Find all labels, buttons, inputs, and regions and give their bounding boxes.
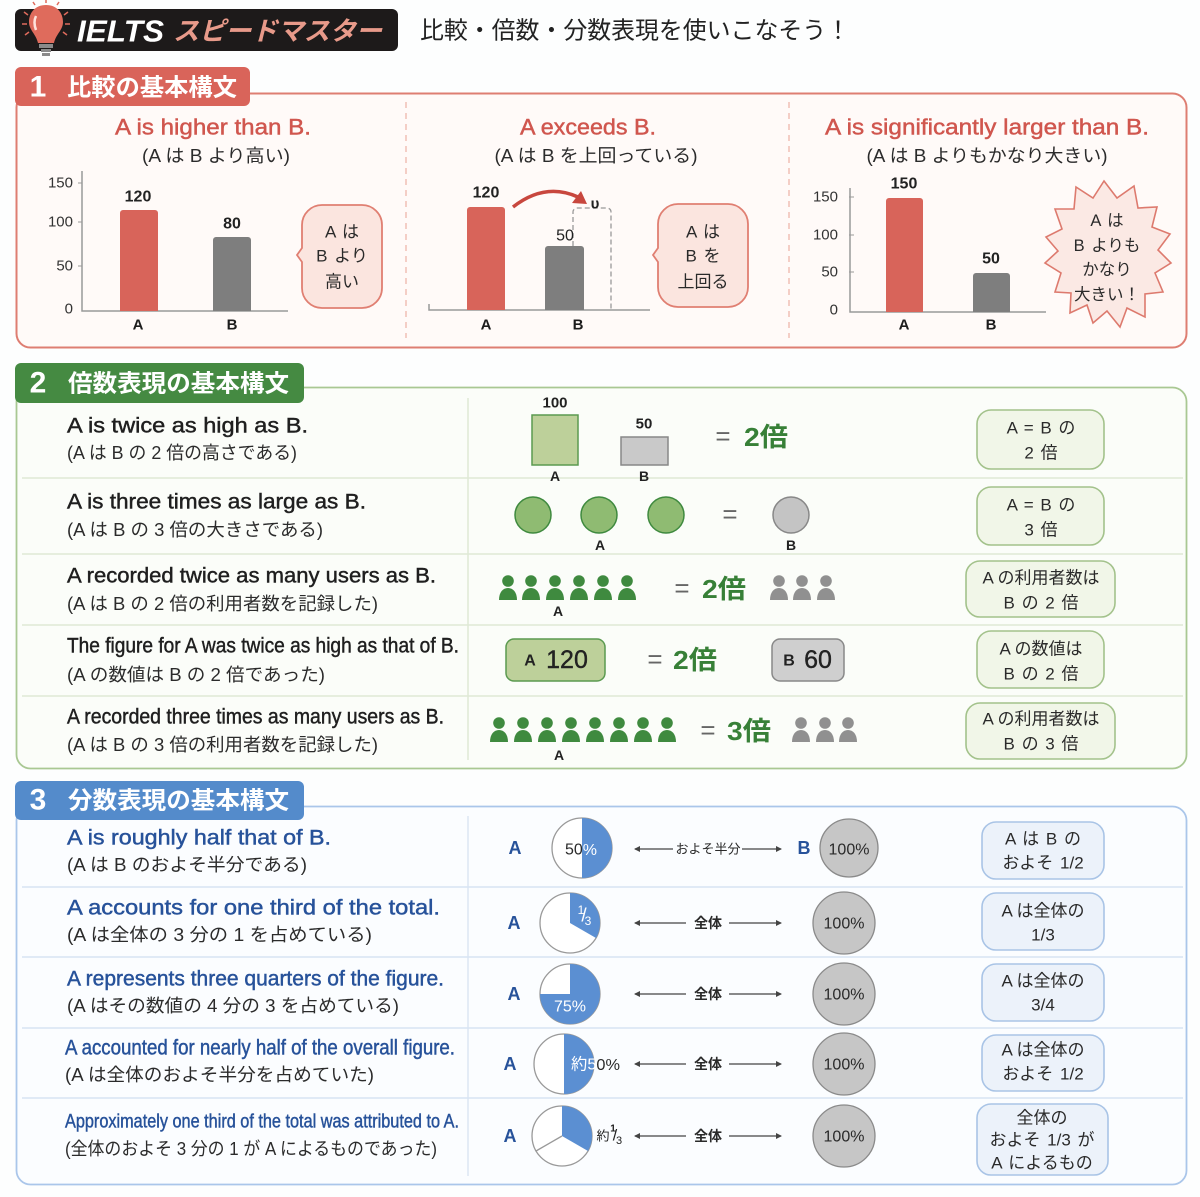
- row 2-5 people: [490, 715, 857, 763]
- row 3-4 callout: [982, 1035, 1104, 1091]
- row 2-5 callout: B の 3 倍: [1004, 734, 1078, 754]
- row 3-3 pie comparison: 全体: [694, 986, 722, 1002]
- row 3-3 text: (A はその数値の 4 分の 3 を占めている): [67, 996, 399, 1016]
- bar chart 3: 50: [982, 250, 1000, 268]
- section 2 tab: 倍数表現の基本構文: [68, 370, 289, 398]
- bar chart 3: [813, 176, 1046, 334]
- row 2-2 text: [67, 490, 366, 540]
- row 2-3 callout: B の 2 倍: [1004, 594, 1078, 612]
- bar chart 1: 120: [125, 188, 151, 206]
- row 3-5 text: Approximately one third of the total was attributed to A.: [65, 1112, 459, 1132]
- row 3-2 pie comparison: 全体: [694, 915, 722, 931]
- row 2-4 value boxes: [506, 639, 844, 681]
- row 3-5 pie comparison: /: [613, 1128, 618, 1144]
- row 3-5 pie comparison: A: [504, 1126, 516, 1146]
- bar chart 1: 50: [56, 258, 73, 274]
- row 3-2 text: (A は全体の 3 分の 1 を占めている): [67, 925, 372, 945]
- row 3-2 pie comparison: 1: [578, 903, 585, 917]
- row 3-2 text: [67, 896, 440, 945]
- row 2-4 value boxes: 120: [546, 646, 588, 674]
- row 2-3 callout: [966, 561, 1115, 617]
- row 2-4 value boxes: B: [783, 652, 795, 670]
- row 3-1 pie comparison: A: [508, 838, 522, 858]
- bar chart 3: A: [899, 316, 910, 334]
- row 3-1 pie comparison: 100%: [829, 842, 869, 858]
- row 2-3 callout: A の利用者数は: [982, 568, 1100, 588]
- bar chart 2: [429, 184, 650, 334]
- callout: starburst: A は: [1090, 212, 1124, 230]
- row 2-3 text: A recorded twice as many users as B.: [67, 564, 436, 588]
- column 3 heading: (A は B よりもかなり大きい): [866, 146, 1108, 166]
- row 2-2 callout: 3 倍: [1024, 520, 1058, 540]
- row 2-1 squares: =: [715, 421, 731, 451]
- row 3-5 pie comparison: 3: [616, 1135, 622, 1147]
- bar chart 3: 0: [830, 302, 838, 318]
- callout: starburst: 大きい！: [1074, 285, 1140, 304]
- row 3-1 pie comparison: およそ半分: [675, 842, 741, 856]
- bar chart 2: υ: [591, 196, 600, 212]
- row 3-3 text: A represents three quarters of the figure.: [67, 968, 444, 990]
- row 2-2 circles: [515, 497, 809, 553]
- row 3-5 text: [65, 1112, 459, 1159]
- bar chart 2: B: [573, 316, 584, 334]
- row 2-1 text: [67, 414, 308, 463]
- callout: starburst: B よりも: [1074, 236, 1140, 255]
- row 3-1 callout: およそ 1/2: [1002, 854, 1084, 872]
- callout 1: [297, 205, 382, 308]
- row 2-4 value boxes: 2倍: [673, 645, 717, 675]
- row 2-2 circles: =: [722, 499, 738, 529]
- callout 2: B を: [685, 246, 721, 266]
- row 2-2 text: A is three times as large as B.: [67, 490, 366, 514]
- row 2-1 text: A is twice as high as B.: [67, 414, 308, 438]
- row 2-1 squares: A: [550, 468, 560, 484]
- row 2-4 text: [67, 634, 459, 685]
- row 3-5 pie comparison: 全体: [694, 1128, 722, 1144]
- column 1 heading: (A は B より高い): [142, 146, 290, 166]
- row 3-4 text: (A は全体のおよそ半分を占めていた): [65, 1065, 374, 1085]
- section 3 tab: 分数表現の基本構文: [68, 788, 289, 814]
- row 2-4 value boxes: 60: [804, 646, 832, 674]
- row 2-5 people: =: [700, 715, 716, 745]
- row 2-5 text: A recorded three times as many users as B.: [67, 706, 444, 728]
- bar chart 1: 0: [65, 300, 73, 318]
- row 3-4 pie comparison: [504, 1033, 875, 1095]
- callout 1: B より: [316, 246, 368, 266]
- subtitle: 比較・倍数・分数表現を使いこなそう！: [420, 18, 850, 44]
- row 2-1 squares: [532, 394, 788, 484]
- row 2-1 text: (A は B の 2 倍の高さである): [67, 443, 297, 463]
- column 1 heading: [115, 114, 311, 166]
- row 2-4 text: The figure for A was twice as high as that of B.: [67, 634, 459, 658]
- row 2-4 callout: B の 2 倍: [1004, 664, 1078, 684]
- panel: section 2 multiples: [15, 363, 1186, 768]
- section 2 tab: 2: [30, 366, 46, 400]
- row 3-1 text: (A は B のおよそ半分である): [67, 855, 307, 875]
- row 3-3 pie comparison: 75%: [554, 998, 586, 1016]
- bar chart 3: 150: [891, 176, 917, 192]
- callout 1: A は: [325, 222, 359, 242]
- bar chart 1: 150: [48, 174, 73, 192]
- row 3-1 callout: [982, 822, 1104, 879]
- row 3-1 text: A is roughly half that of B.: [67, 826, 331, 850]
- row 3-5 pie comparison: 約: [596, 1128, 610, 1144]
- bar chart 3: B: [986, 316, 997, 334]
- panel: section 3 fractions: [15, 781, 1186, 1184]
- bar chart 2: 50: [556, 228, 574, 244]
- bar chart 1: 100: [48, 214, 73, 230]
- row 2-3 people: [499, 573, 835, 619]
- row 3-2 pie comparison: /: [581, 906, 587, 926]
- bar chart 1: A: [133, 316, 144, 334]
- column 2 heading: A exceeds B.: [520, 114, 656, 140]
- row 3-1 pie comparison: 50%: [565, 842, 597, 858]
- row 3-4 text: A accounted for nearly half of the overall figure.: [65, 1036, 455, 1060]
- row 2-3 people: =: [674, 573, 690, 603]
- row 3-3 callout: [982, 964, 1104, 1021]
- row 3-3 callout: 3/4: [1031, 996, 1055, 1014]
- row 2-5 people: 3倍: [727, 716, 771, 746]
- row 3-4 pie comparison: 約50%: [571, 1056, 620, 1074]
- row 3-1 callout: A は B の: [1005, 830, 1081, 848]
- bar chart 1: [48, 171, 288, 334]
- row 2-5 people: A: [554, 747, 564, 763]
- row 3-2 callout: A は全体の: [1001, 902, 1085, 920]
- callout: starburst: かなり: [1082, 260, 1132, 279]
- row 3-2 pie comparison: [508, 892, 875, 954]
- row 3-2 text: A accounts for one third of the total.: [67, 896, 440, 920]
- column 3 heading: A is significantly larger than B.: [825, 114, 1149, 140]
- section 1 tab: [15, 67, 250, 106]
- section 3 tab: [15, 781, 304, 820]
- column 2 heading: [494, 114, 698, 166]
- logo katakana: スピードマスター: [173, 16, 383, 46]
- section 1 tab: 1: [30, 70, 46, 104]
- row 3-4 pie comparison: A: [504, 1054, 516, 1074]
- column 1 heading: A is higher than B.: [115, 114, 311, 140]
- row 3-4 text: [65, 1036, 455, 1085]
- icon: light bulb: [22, 0, 70, 56]
- row 3-5 callout: およそ 1/3 が: [989, 1130, 1095, 1150]
- row 2-3 text: [67, 564, 436, 614]
- row 2-5 callout: [966, 703, 1115, 759]
- bar chart 2: 120: [473, 184, 499, 202]
- row 3-5 callout: [977, 1104, 1108, 1175]
- section 2 tab: [15, 363, 304, 403]
- section 3 tab: 3: [30, 784, 46, 816]
- row 2-4 callout: [977, 631, 1104, 688]
- row 3-3 pie comparison: 100%: [824, 986, 864, 1004]
- row 2-1 squares: B: [639, 468, 649, 484]
- logo text: IELTS: [77, 14, 164, 48]
- row 2-2 callout: A = B の: [1007, 496, 1075, 514]
- bar chart 3: 150: [813, 188, 838, 206]
- row 2-1 callout: 2 倍: [1024, 444, 1058, 462]
- row 2-1 callout: [977, 410, 1104, 469]
- bar chart 1: 80: [223, 216, 241, 232]
- row 2-4 value boxes: =: [647, 644, 663, 674]
- header banner: [15, 0, 398, 56]
- callout 2: A は: [686, 222, 720, 242]
- row 3-3 pie comparison: [508, 963, 875, 1025]
- row 2-5 callout: A の利用者数は: [982, 710, 1100, 728]
- row 3-5 callout: A によるもの: [991, 1154, 1093, 1172]
- row 2-4 text: (A の数値は B の 2 倍であった): [67, 665, 325, 685]
- row 3-3 callout: A は全体の: [1001, 972, 1085, 990]
- row 3-4 callout: およそ 1/2: [1002, 1064, 1084, 1084]
- bar chart 2: A: [481, 316, 492, 334]
- callout 2: 上回る: [678, 272, 728, 292]
- bar chart 3: 100: [813, 226, 838, 244]
- row 3-1 text: [67, 826, 331, 875]
- row 3-4 callout: A は全体の: [1001, 1040, 1085, 1060]
- callout 2: [653, 204, 748, 307]
- row 2-1 callout: A = B の: [1007, 418, 1075, 438]
- row 3-4 pie comparison: 全体: [694, 1056, 722, 1072]
- callout: starburst: [1045, 181, 1171, 327]
- row 3-4 pie comparison: 100%: [824, 1056, 864, 1074]
- row 3-2 pie comparison: 100%: [824, 916, 864, 932]
- row 3-2 callout: 1/3: [1031, 926, 1055, 944]
- row 2-1 squares: 50: [636, 416, 652, 432]
- row 2-1 squares: 2倍: [744, 422, 788, 452]
- row 2-3 text: (A は B の 2 倍の利用者数を記録した): [67, 594, 378, 614]
- row 3-2 callout: [982, 893, 1104, 950]
- row 3-3 pie comparison: A: [508, 984, 520, 1004]
- row 3-5 pie comparison: 100%: [824, 1128, 864, 1146]
- callout 1: 高い: [325, 272, 359, 292]
- section 1 tab: 比較の基本構文: [67, 74, 237, 102]
- row 2-3 people: 2倍: [702, 574, 746, 604]
- column 3 heading: [825, 114, 1149, 166]
- row 2-2 callout: [977, 487, 1104, 545]
- row 2-3 people: A: [553, 603, 563, 619]
- row 2-5 text: [67, 706, 444, 755]
- row 3-5 text: (全体のおよそ 3 分の 1 が A によるものであった): [65, 1139, 437, 1159]
- row 2-1 squares: 100: [542, 394, 568, 412]
- row 3-3 text: [67, 968, 444, 1016]
- row 3-5 pie comparison: [504, 1105, 875, 1167]
- row 3-2 pie comparison: 3: [585, 914, 592, 928]
- row 2-2 text: (A は B の 3 倍の大きさである): [67, 520, 323, 540]
- row 3-2 pie comparison: A: [508, 913, 520, 933]
- row 2-5 text: (A は B の 3 倍の利用者数を記録した): [67, 735, 378, 755]
- bar chart 1: B: [227, 316, 238, 334]
- row 3-1 pie comparison: B: [798, 838, 810, 858]
- arrow: exceed: [513, 191, 587, 207]
- row 3-5 pie comparison: 1: [610, 1124, 616, 1134]
- row 2-2 circles: A: [595, 537, 605, 553]
- row 2-4 callout: A の数値は: [999, 640, 1083, 658]
- row 2-4 value boxes: A: [524, 652, 536, 670]
- row 3-1 pie comparison: [508, 818, 878, 878]
- bar chart 3: 50: [821, 264, 838, 280]
- row 2-2 circles: B: [786, 537, 796, 553]
- column 2 heading: (A は B を上回っている): [494, 146, 698, 166]
- row 3-5 callout: 全体の: [1016, 1108, 1068, 1128]
- panel: section 1 comparison: [15, 67, 1186, 348]
